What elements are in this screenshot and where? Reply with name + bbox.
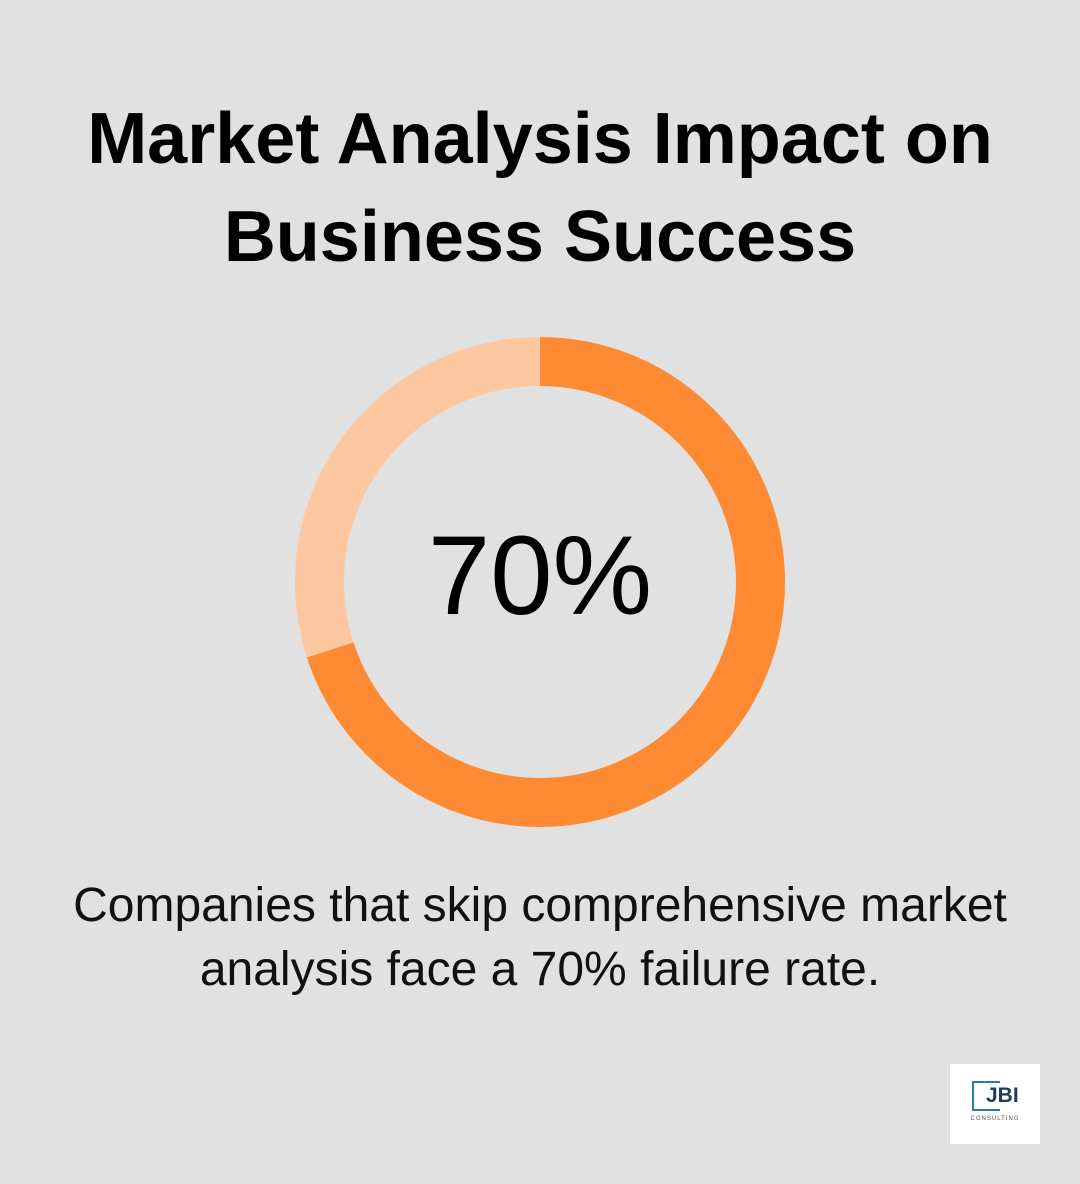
title [87, 99, 993, 277]
logo: JBI [986, 1084, 1019, 1107]
description text: analysis face a 70% failure rate. [200, 943, 880, 996]
logo [950, 1064, 1040, 1144]
title: Market Analysis Impact on [87, 99, 993, 179]
logo: CONSULTING [971, 1116, 1019, 1122]
title: Business Success [224, 197, 856, 277]
description text: Companies that skip comprehensive market [73, 879, 1007, 932]
donut chart: 70% [428, 513, 652, 638]
description text [73, 879, 1007, 996]
